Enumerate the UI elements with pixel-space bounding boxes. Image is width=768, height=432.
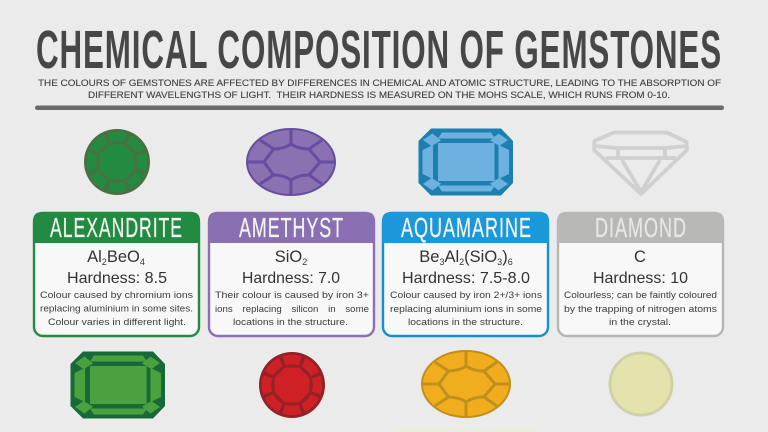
description: alexandrite	[40, 290, 193, 328]
heading: aquamarine: AQUAMARINE	[401, 212, 532, 243]
description: amethyst	[215, 290, 369, 328]
description: aquamarine	[390, 290, 542, 328]
formula: alexandrite: Al	[87, 248, 102, 266]
panel header: alexandrite	[33, 212, 200, 243]
hardness: diamond: Hardness: 10	[593, 270, 688, 287]
header rule	[35, 106, 724, 110]
panel header: amethyst	[208, 212, 375, 243]
description: diamond	[564, 290, 717, 328]
panel: diamond	[557, 212, 724, 336]
formula: alexandrite: 4	[140, 257, 145, 267]
description: aquamarine: replacing aluminium ions in some	[390, 304, 542, 315]
panel: amethyst	[208, 212, 375, 336]
heading: amethyst: AMETHYST	[239, 212, 344, 243]
formula: aquamarine: )	[502, 248, 508, 266]
intro text: DIFFERENT WAVELENGTHS OF LIGHT. THEIR HARDNESS IS MEASURED ON THE MOHS SCALE, WHICH RUNS FROM 0-10.	[88, 90, 670, 101]
formula: diamond: C	[634, 248, 646, 266]
icon: aquamarine gem	[418, 128, 513, 196]
description: amethyst: ions replacing silicon in some	[215, 304, 369, 315]
icon: topaz gem	[422, 351, 510, 417]
formula: aquamarine: 3	[497, 257, 502, 267]
icon: amethyst gem	[247, 129, 335, 195]
icon: ruby gem	[259, 352, 325, 418]
description: amethyst: locations in the structure.	[233, 317, 348, 328]
intro text: THE COLOURS OF GEMSTONES ARE AFFECTED BY DIFFERENCES IN CHEMICAL AND ATOMIC STRUCTURE, LEADING TO THE ABSORPTION OF	[38, 78, 721, 89]
formula: alexandrite: 2	[102, 257, 107, 267]
description: diamond: by the trapping of nitrogen atoms	[564, 304, 717, 315]
formula: aquamarine: 6	[508, 257, 513, 267]
description: aquamarine: Colour caused by iron 2+/3+ ions	[390, 290, 542, 301]
description: diamond: in the crystal.	[609, 317, 671, 328]
intro text	[38, 78, 721, 101]
hardness: amethyst: Hardness: 7.0	[242, 270, 340, 287]
formula: aquamarine: Be	[419, 248, 439, 266]
hardness: alexandrite: Hardness: 8.5	[67, 270, 167, 287]
icon: emerald gem	[70, 352, 165, 418]
formula: aquamarine: (SiO	[464, 248, 497, 266]
hardness: aquamarine: Hardness: 7.5-8.0	[402, 270, 530, 287]
description: aquamarine: locations in the structure.	[408, 317, 523, 328]
formula: amethyst: 2	[302, 257, 307, 267]
description: alexandrite: Colour varies in different light.	[48, 317, 186, 328]
heading: alexandrite: ALEXANDRITE	[50, 212, 183, 243]
panel: alexandrite	[33, 212, 200, 336]
panel: aquamarine	[382, 212, 549, 336]
formula: amethyst: SiO	[275, 248, 302, 266]
description: alexandrite: Colour caused by chromium ions	[40, 290, 193, 301]
description: alexandrite: replacing aluminium in some sites.	[40, 304, 193, 314]
description: diamond: Colourless; can be faintly coloured	[564, 290, 717, 301]
heading: diamond: DIAMOND	[595, 212, 687, 243]
icon: alexandrite gem	[84, 129, 150, 195]
formula: aquamarine: 2	[459, 257, 464, 267]
formula: alexandrite: BeO	[107, 248, 140, 266]
panel header: aquamarine	[382, 212, 549, 243]
panel header: diamond	[557, 212, 724, 243]
icon: diamond gem	[594, 132, 687, 194]
description: amethyst: Their colour is caused by iron 3+	[215, 290, 369, 301]
formula: aquamarine: Al	[444, 248, 459, 266]
icon: pale yellow round gem	[610, 353, 672, 415]
formula: aquamarine: 3	[439, 257, 444, 267]
